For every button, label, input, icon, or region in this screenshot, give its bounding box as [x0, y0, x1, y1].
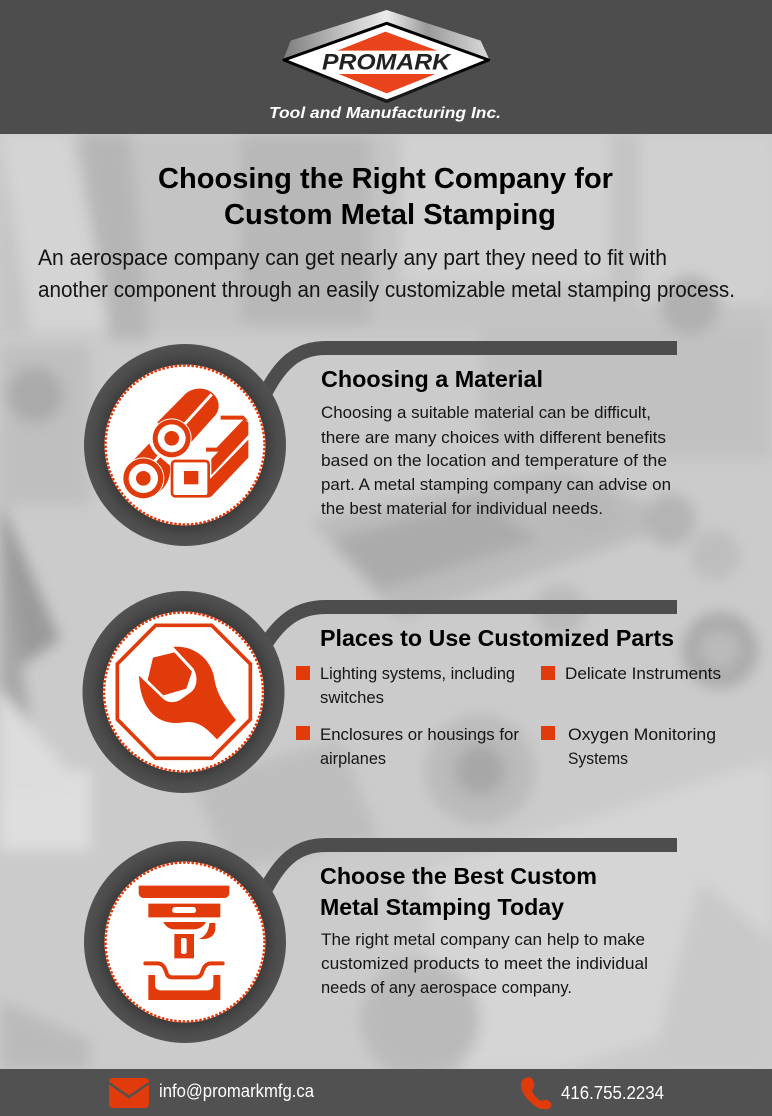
icon: envelope	[109, 1078, 149, 1108]
body text: based on the location and temperature of the	[321, 451, 667, 470]
title: Custom Metal Stamping	[224, 199, 556, 231]
panel: choosing a material	[84, 344, 677, 546]
heading: Choose the Best Custom	[320, 863, 597, 889]
email: info@promarkmfg.ca	[159, 1081, 315, 1101]
heading: Metal Stamping Today	[320, 894, 564, 920]
heading: Choosing a Material	[321, 366, 543, 392]
body text: the best material for individual needs.	[321, 499, 603, 518]
heading	[320, 863, 597, 920]
connector arm 1	[262, 348, 677, 400]
title	[158, 163, 613, 231]
icon: phone	[521, 1077, 551, 1109]
badge circle 3	[84, 841, 286, 1043]
body text	[321, 930, 648, 997]
body text: part. A metal stamping company can advise on	[321, 475, 671, 494]
footer band	[0, 1069, 772, 1116]
icon: stamping press	[139, 886, 229, 1000]
bullet: enclosures: Enclosures or housings for	[320, 725, 519, 744]
bullet: oxygen monitoring: Systems	[568, 749, 628, 768]
phone number: 416.755.2234	[561, 1083, 664, 1103]
bullet: enclosures	[296, 725, 519, 768]
bullet: delicate instruments: Delicate Instruments	[565, 664, 721, 683]
bullet: lighting systems	[296, 664, 515, 707]
body text: there are many choices with different benefits	[321, 428, 666, 447]
body text: The right metal company can help to make	[321, 930, 645, 949]
body text: needs of any aerospace company.	[321, 978, 572, 997]
badge circle 1	[84, 344, 286, 546]
panel: choose the best custom metal stamping today	[84, 841, 677, 1043]
header band	[0, 0, 772, 134]
intro paragraph	[38, 245, 735, 302]
body text	[321, 403, 671, 518]
panel: places to use customized parts	[82, 591, 721, 793]
icon: metal bars	[122, 389, 248, 499]
body text: Choosing a suitable material can be difficult,	[321, 403, 651, 422]
title: Choosing the Right Company for	[158, 163, 613, 195]
connector arm 2	[262, 607, 677, 650]
logo tagline: Tool and Manufacturing Inc.	[269, 105, 501, 122]
bullet: oxygen monitoring: Oxygen Monitoring	[568, 725, 716, 744]
icon: wrench in octagon	[117, 625, 250, 758]
bullet: enclosures: airplanes	[320, 749, 386, 768]
intro paragraph: An aerospace company can get nearly any part they need to fit with	[38, 245, 667, 270]
logo: Promark: PROMARK	[322, 50, 452, 74]
intro paragraph: another component through an easily customizable metal stamping process.	[38, 277, 735, 302]
connector arm 3	[262, 845, 677, 897]
badge circle 2	[82, 591, 284, 793]
heading: Places to Use Customized Parts	[320, 625, 674, 651]
bullet: lighting systems: Lighting systems, including	[320, 664, 515, 683]
body text: customized products to meet the individual	[321, 954, 648, 973]
logo: Promark	[283, 10, 489, 103]
bullet: oxygen monitoring	[541, 725, 716, 768]
bullet: lighting systems: switches	[320, 688, 384, 707]
